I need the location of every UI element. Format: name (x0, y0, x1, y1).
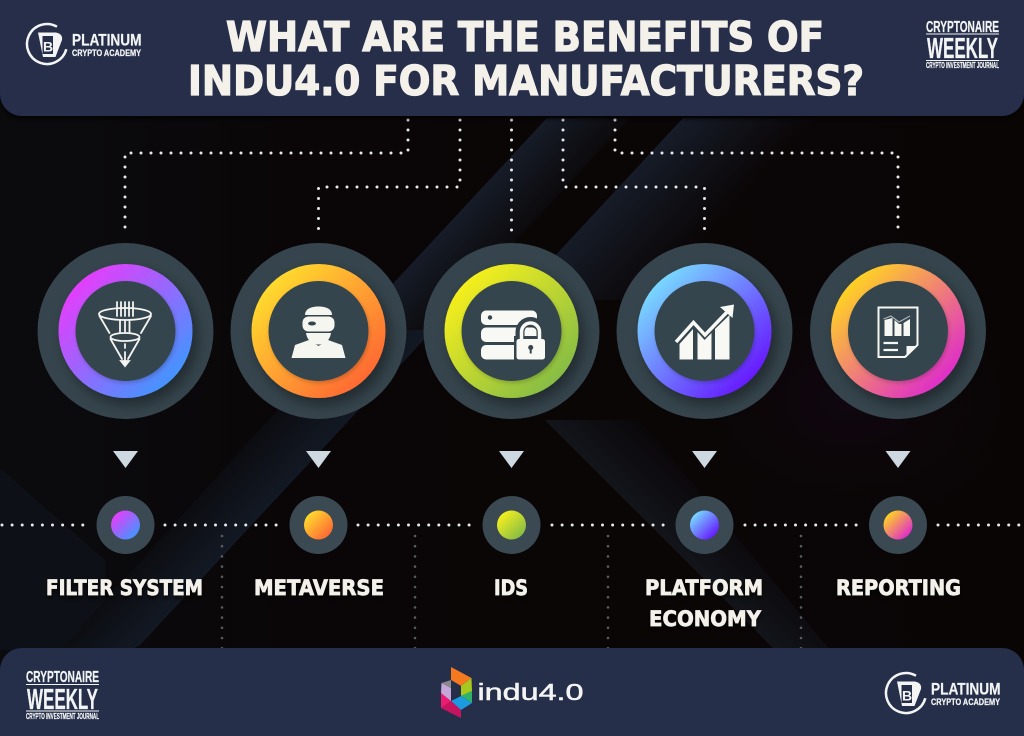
timeline node (676, 496, 734, 554)
footer logo: cryptonaire weekly (26, 669, 99, 721)
item 3: ids (424, 243, 600, 600)
connector: reporting (615, 120, 898, 235)
connector: ids (510, 120, 513, 235)
timeline node (290, 496, 348, 554)
footer logo: platinum crypto academy: CRYPTO ACADEMY (931, 697, 1001, 708)
label: METAVERSE (254, 576, 384, 600)
item 4: platform economy (616, 243, 792, 631)
connector: filter system (125, 120, 408, 235)
footer logo: platinum crypto academy: PLATINUM (931, 680, 1000, 698)
title: WHAT ARE THE BENEFITS OF (226, 13, 824, 61)
label: FILTER SYSTEM (46, 576, 203, 600)
logo: platinum crypto academy (27, 24, 142, 64)
label: IDS (494, 576, 528, 600)
timeline node (96, 496, 154, 554)
large ring badge (810, 243, 986, 419)
large ring badge (424, 243, 600, 419)
item 2: metaverse (230, 243, 406, 600)
large ring badge (616, 243, 792, 419)
footer logo: platinum crypto academy: B (902, 688, 912, 704)
large ring badge (38, 243, 214, 419)
footer logo: indu4.0: indu4.0 (478, 679, 584, 705)
label: PLATFORM (645, 576, 763, 600)
triangle pointer (499, 451, 524, 468)
logo: platinum crypto academy: B (43, 38, 53, 54)
label: REPORTING (836, 576, 961, 600)
icon: person with vr headset (292, 306, 346, 358)
footer logo: cryptonaire weekly: CRYPTONAIRE (26, 669, 99, 686)
logo: platinum crypto academy: PLATINUM (72, 30, 142, 50)
connector: platform economy (563, 120, 704, 235)
logo: platinum crypto academy: CRYPTO ACADEMY (72, 48, 142, 59)
icon: server with padlock (481, 310, 548, 362)
timeline node (482, 496, 540, 554)
footer logo: platinum crypto academy (886, 673, 1001, 713)
footer logo: cryptonaire weekly: WEEKLY (27, 684, 98, 716)
header bar (0, 0, 1024, 116)
triangle pointer (692, 451, 717, 468)
timeline node (869, 496, 927, 554)
icon: report document (878, 308, 918, 357)
title (188, 13, 864, 105)
label: ECONOMY (649, 607, 762, 631)
triangle pointer (886, 451, 910, 468)
icon: rising bar chart (676, 304, 734, 360)
timeline dotted line (2, 524, 1024, 526)
item 1: filter system (38, 243, 214, 600)
triangle pointer (113, 451, 138, 468)
label (645, 576, 763, 631)
footer logo: indu4.0 (441, 667, 584, 718)
footer bar (0, 648, 1024, 736)
icon: funnel filter (99, 302, 151, 366)
footer logo: cryptonaire weekly: CRYPTO INVESTMENT JOURNAL (26, 712, 99, 721)
connector: metaverse (318, 120, 460, 235)
lower dim dotted lines (222, 536, 801, 652)
triangle pointer (306, 451, 331, 468)
logo: cryptonaire weekly (926, 19, 999, 70)
item 5: reporting (810, 243, 986, 600)
title: INDU4.0 FOR MANUFACTURERS? (188, 57, 864, 105)
large ring badge (230, 243, 406, 419)
